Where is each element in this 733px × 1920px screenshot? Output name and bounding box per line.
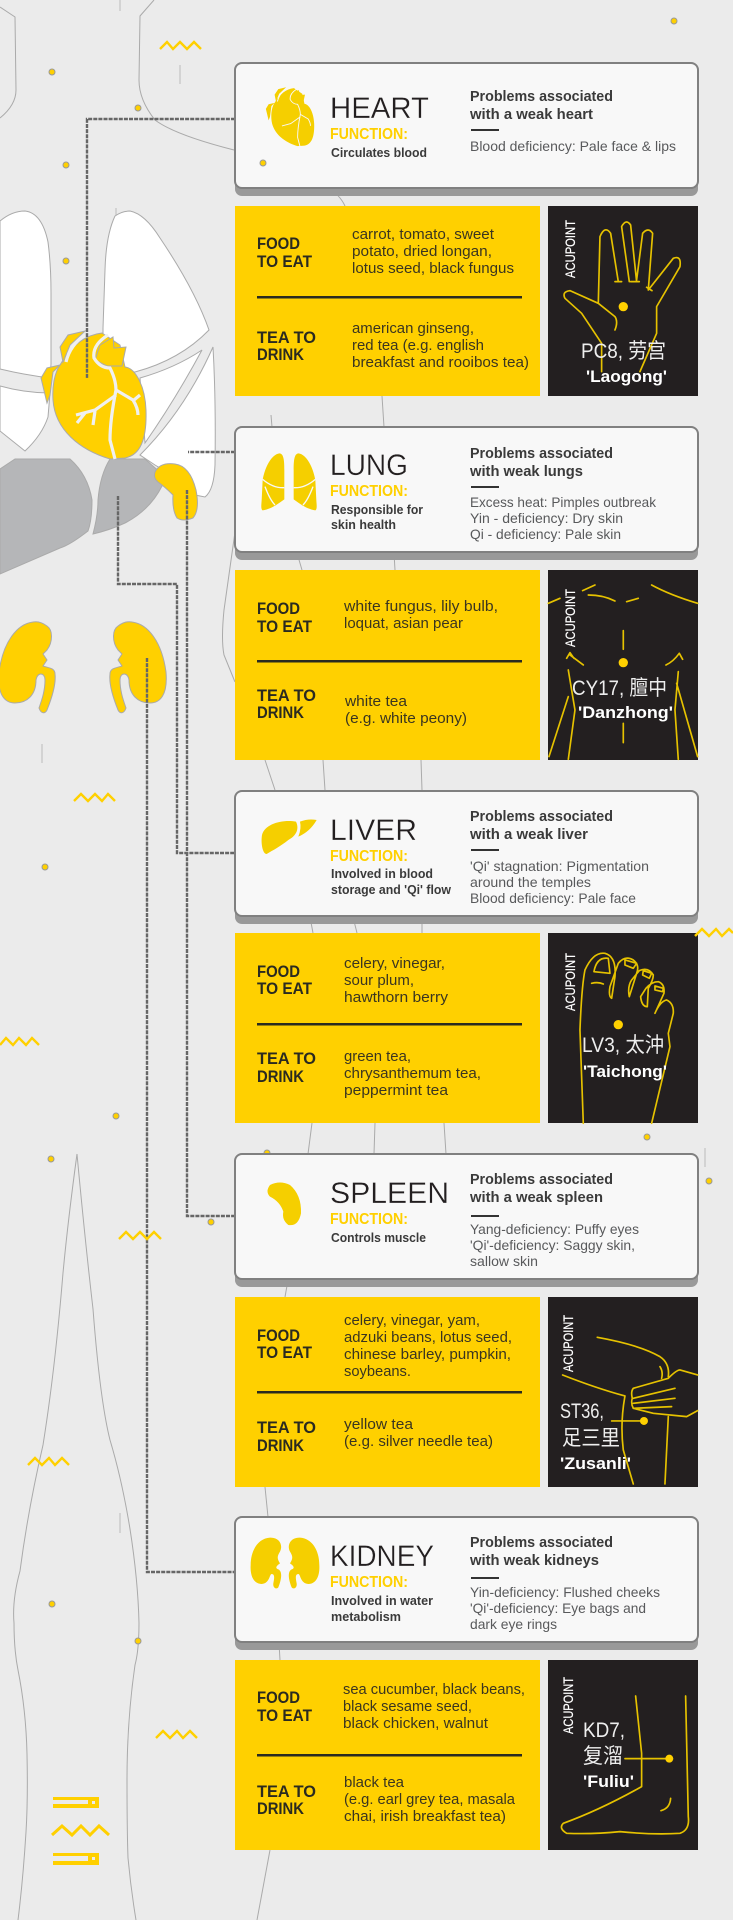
- kidney food panel: chai, irish breakfast tea): [344, 1808, 506, 1825]
- heart food panel: DRINK: [257, 345, 305, 364]
- lung acupoint panel: CY17, 膻中: [572, 677, 667, 700]
- kidney food panel: TEA TO: [257, 1782, 316, 1801]
- spleen food panel: celery, vinegar, yam,: [344, 1312, 480, 1329]
- function text: Involved in blood: [331, 867, 433, 881]
- heart acupoint panel: PC8, 劳宫: [581, 340, 666, 363]
- problems text: [469, 446, 657, 542]
- spleen food panel: soybeans.: [344, 1363, 411, 1380]
- heading: spleen: SPLEEN: [330, 1177, 449, 1210]
- kidney card: [235, 1517, 698, 1650]
- lung food panel: FOOD: [257, 599, 300, 618]
- body outline background: [0, 0, 446, 1920]
- problems text: [469, 809, 649, 906]
- function text: Involved in water: [331, 1594, 433, 1608]
- spleen food panel: (e.g. silver needle tea): [344, 1433, 493, 1450]
- problems text: Qi - deficiency: Pale skin: [470, 526, 621, 542]
- kidney food panel: black sesame seed,: [343, 1698, 472, 1715]
- spleen food panel: FOOD: [257, 1326, 300, 1345]
- spleen card: [235, 1154, 698, 1287]
- kidney food panel: [235, 1660, 540, 1850]
- problems text: around the temples: [470, 874, 591, 890]
- kidney food panel: black tea: [344, 1774, 405, 1791]
- heading: lung: LUNG: [330, 449, 408, 482]
- heart food panel: [235, 206, 540, 396]
- problems text: [469, 1535, 660, 1632]
- liver food panel: green tea,: [344, 1048, 411, 1065]
- liver food panel: DRINK: [257, 1067, 305, 1086]
- lung acupoint panel: ACUPOINT: [562, 589, 578, 647]
- kidney food panel: TO EAT: [257, 1706, 313, 1725]
- decorative zigzag at right edge: [695, 929, 733, 936]
- function text: [330, 848, 451, 897]
- problems text: [469, 89, 676, 154]
- lung acupoint panel: [548, 570, 698, 760]
- heart food panel: potato, dried longan,: [352, 243, 492, 260]
- kidney food panel: FOOD: [257, 1688, 300, 1707]
- lung food panel: [235, 570, 540, 760]
- liver food panel: TEA TO: [257, 1049, 316, 1068]
- bottom decorative glyph: [52, 1797, 109, 1865]
- heart food panel: red tea (e.g. english: [352, 337, 484, 354]
- problems text: 'Qi'-deficiency: Eye bags and: [470, 1600, 646, 1616]
- function text: FUNCTION:: [330, 1574, 408, 1591]
- icon: spleen: [267, 1182, 301, 1225]
- section: liver: [235, 791, 698, 1123]
- spleen food panel: chinese barley, pumpkin,: [344, 1346, 511, 1363]
- function text: metabolism: [331, 1610, 401, 1624]
- lung card: [235, 427, 698, 560]
- kidney acupoint panel: KD7,: [583, 1719, 625, 1742]
- heart food panel: breakfast and rooibos tea): [352, 354, 529, 371]
- section: heart: [235, 63, 698, 396]
- function text: FUNCTION:: [330, 126, 408, 143]
- section: lung: [235, 427, 698, 760]
- function text: Controls muscle: [331, 1231, 426, 1245]
- small tick marks: [42, 0, 705, 1533]
- icon: hand: [564, 222, 680, 372]
- heading: liver: LIVER: [330, 814, 417, 847]
- spleen food panel: TO EAT: [257, 1343, 313, 1362]
- kidney acupoint panel: 复溜: [583, 1745, 623, 1768]
- lungs illustration: [0, 211, 215, 497]
- lung food panel: white fungus, lily bulb,: [343, 598, 498, 615]
- heart acupoint panel: [548, 206, 698, 396]
- heart food panel: carrot, tomato, sweet: [352, 226, 495, 243]
- icon: ankle: [561, 1696, 689, 1834]
- section: kidney: [235, 1517, 698, 1850]
- connector lines from organs to cards: [87, 119, 235, 1572]
- spleen illustration: [154, 464, 197, 520]
- lung food panel: TEA TO: [257, 686, 316, 705]
- problems text: Problems associated: [470, 1172, 613, 1188]
- problems text: [469, 1172, 639, 1269]
- heart food panel: lotus seed, black fungus: [352, 260, 514, 277]
- icon: foot: [580, 953, 673, 1123]
- problems text: sallow skin: [470, 1253, 538, 1269]
- problems text: Problems associated: [470, 809, 613, 825]
- heart food panel: american ginseng,: [352, 320, 474, 337]
- problems text: 'Qi' stagnation: Pigmentation: [470, 858, 649, 874]
- function text: [330, 1211, 426, 1245]
- problems text: with a weak spleen: [469, 1190, 603, 1206]
- problems text: Problems associated: [470, 446, 613, 462]
- heart food panel: TEA TO: [257, 328, 316, 347]
- icon: lungs: [261, 453, 317, 510]
- liver acupoint panel: ACUPOINT: [562, 953, 578, 1011]
- problems text: with a weak liver: [469, 827, 588, 843]
- spleen acupoint panel: [548, 1297, 698, 1487]
- function text: Responsible for: [331, 503, 423, 517]
- kidney food panel: DRINK: [257, 1799, 305, 1818]
- problems text: Blood deficiency: Pale face: [470, 890, 636, 906]
- kidney food panel: (e.g. earl grey tea, masala: [344, 1791, 516, 1808]
- problems text: Excess heat: Pimples outbreak: [470, 494, 657, 510]
- liver illustration: [0, 459, 162, 574]
- kidney acupoint panel: 'Fuliu': [583, 1772, 634, 1791]
- kidney acupoint panel: ACUPOINT: [560, 1677, 576, 1734]
- function text: Circulates blood: [331, 146, 427, 160]
- problems text: Yang-deficiency: Puffy eyes: [470, 1221, 639, 1237]
- spleen acupoint panel: 足三里: [562, 1427, 620, 1450]
- problems text: Yin - deficiency: Dry skin: [470, 510, 623, 526]
- kidney acupoint panel: [548, 1660, 698, 1850]
- function text: FUNCTION:: [330, 483, 408, 500]
- problems text: with weak kidneys: [469, 1553, 599, 1569]
- heading: heart: HEART: [330, 92, 429, 125]
- problems text: with a weak heart: [469, 107, 593, 123]
- heart acupoint panel: 'Laogong': [586, 367, 667, 386]
- function text: skin health: [331, 518, 396, 532]
- icon: knee and hand: [563, 1337, 698, 1484]
- lung food panel: (e.g. white peony): [345, 710, 467, 727]
- heart food panel: FOOD: [257, 234, 300, 253]
- problems text: Yin-deficiency: Flushed cheeks: [470, 1584, 660, 1600]
- problems text: 'Qi'-deficiency: Saggy skin,: [470, 1237, 635, 1253]
- liver acupoint panel: [548, 933, 698, 1123]
- liver food panel: [235, 933, 540, 1123]
- function text: [330, 126, 427, 160]
- lung food panel: DRINK: [257, 703, 305, 722]
- problems text: Problems associated: [470, 89, 613, 105]
- liver card: [235, 791, 698, 924]
- liver food panel: sour plum,: [344, 972, 414, 989]
- icon: heart: [266, 87, 314, 146]
- function text: [330, 483, 423, 532]
- liver food panel: peppermint tea: [344, 1082, 449, 1099]
- icon: chest: [548, 585, 698, 759]
- problems text: with weak lungs: [469, 464, 583, 480]
- lung acupoint panel: 'Danzhong': [578, 703, 673, 722]
- function text: FUNCTION:: [330, 848, 408, 865]
- lung food panel: loquat, asian pear: [344, 615, 463, 632]
- heading: kidney: KIDNEY: [330, 1540, 434, 1573]
- spleen food panel: [235, 1297, 540, 1487]
- section: spleen: [235, 1154, 698, 1487]
- problems text: Blood deficiency: Pale face & lips: [470, 138, 676, 154]
- problems text: Problems associated: [470, 1535, 613, 1551]
- liver acupoint panel: LV3, 太沖: [582, 1034, 664, 1057]
- icon: liver: [262, 819, 317, 854]
- liver food panel: FOOD: [257, 962, 300, 981]
- liver food panel: hawthorn berry: [344, 989, 449, 1006]
- kidney food panel: sea cucumber, black beans,: [343, 1681, 525, 1698]
- function text: FUNCTION:: [330, 1211, 408, 1228]
- problems text: dark eye rings: [470, 1616, 557, 1632]
- function text: storage and 'Qi' flow: [331, 883, 451, 897]
- heart illustration: [41, 331, 146, 459]
- spleen food panel: yellow tea: [344, 1416, 414, 1433]
- lung food panel: white tea: [344, 693, 408, 710]
- lung food panel: TO EAT: [257, 617, 313, 636]
- kidney food panel: black chicken, walnut: [343, 1715, 489, 1732]
- spleen acupoint panel: ACUPOINT: [560, 1315, 576, 1372]
- spleen food panel: adzuki beans, lotus seed,: [344, 1329, 512, 1346]
- spleen food panel: DRINK: [257, 1436, 305, 1455]
- heart acupoint panel: ACUPOINT: [562, 220, 578, 278]
- liver food panel: TO EAT: [257, 979, 313, 998]
- heart card: [235, 63, 698, 196]
- function text: [330, 1574, 433, 1624]
- spleen food panel: TEA TO: [257, 1418, 316, 1437]
- heart food panel: TO EAT: [257, 252, 313, 271]
- kidneys illustration: [0, 622, 166, 713]
- liver food panel: celery, vinegar,: [344, 955, 445, 972]
- liver food panel: chrysanthemum tea,: [344, 1065, 481, 1082]
- liver acupoint panel: 'Taichong': [583, 1062, 667, 1081]
- spleen acupoint panel: ST36,: [560, 1400, 604, 1423]
- spleen acupoint panel: 'Zusanli': [560, 1454, 631, 1473]
- icon: kidneys: [251, 1538, 319, 1588]
